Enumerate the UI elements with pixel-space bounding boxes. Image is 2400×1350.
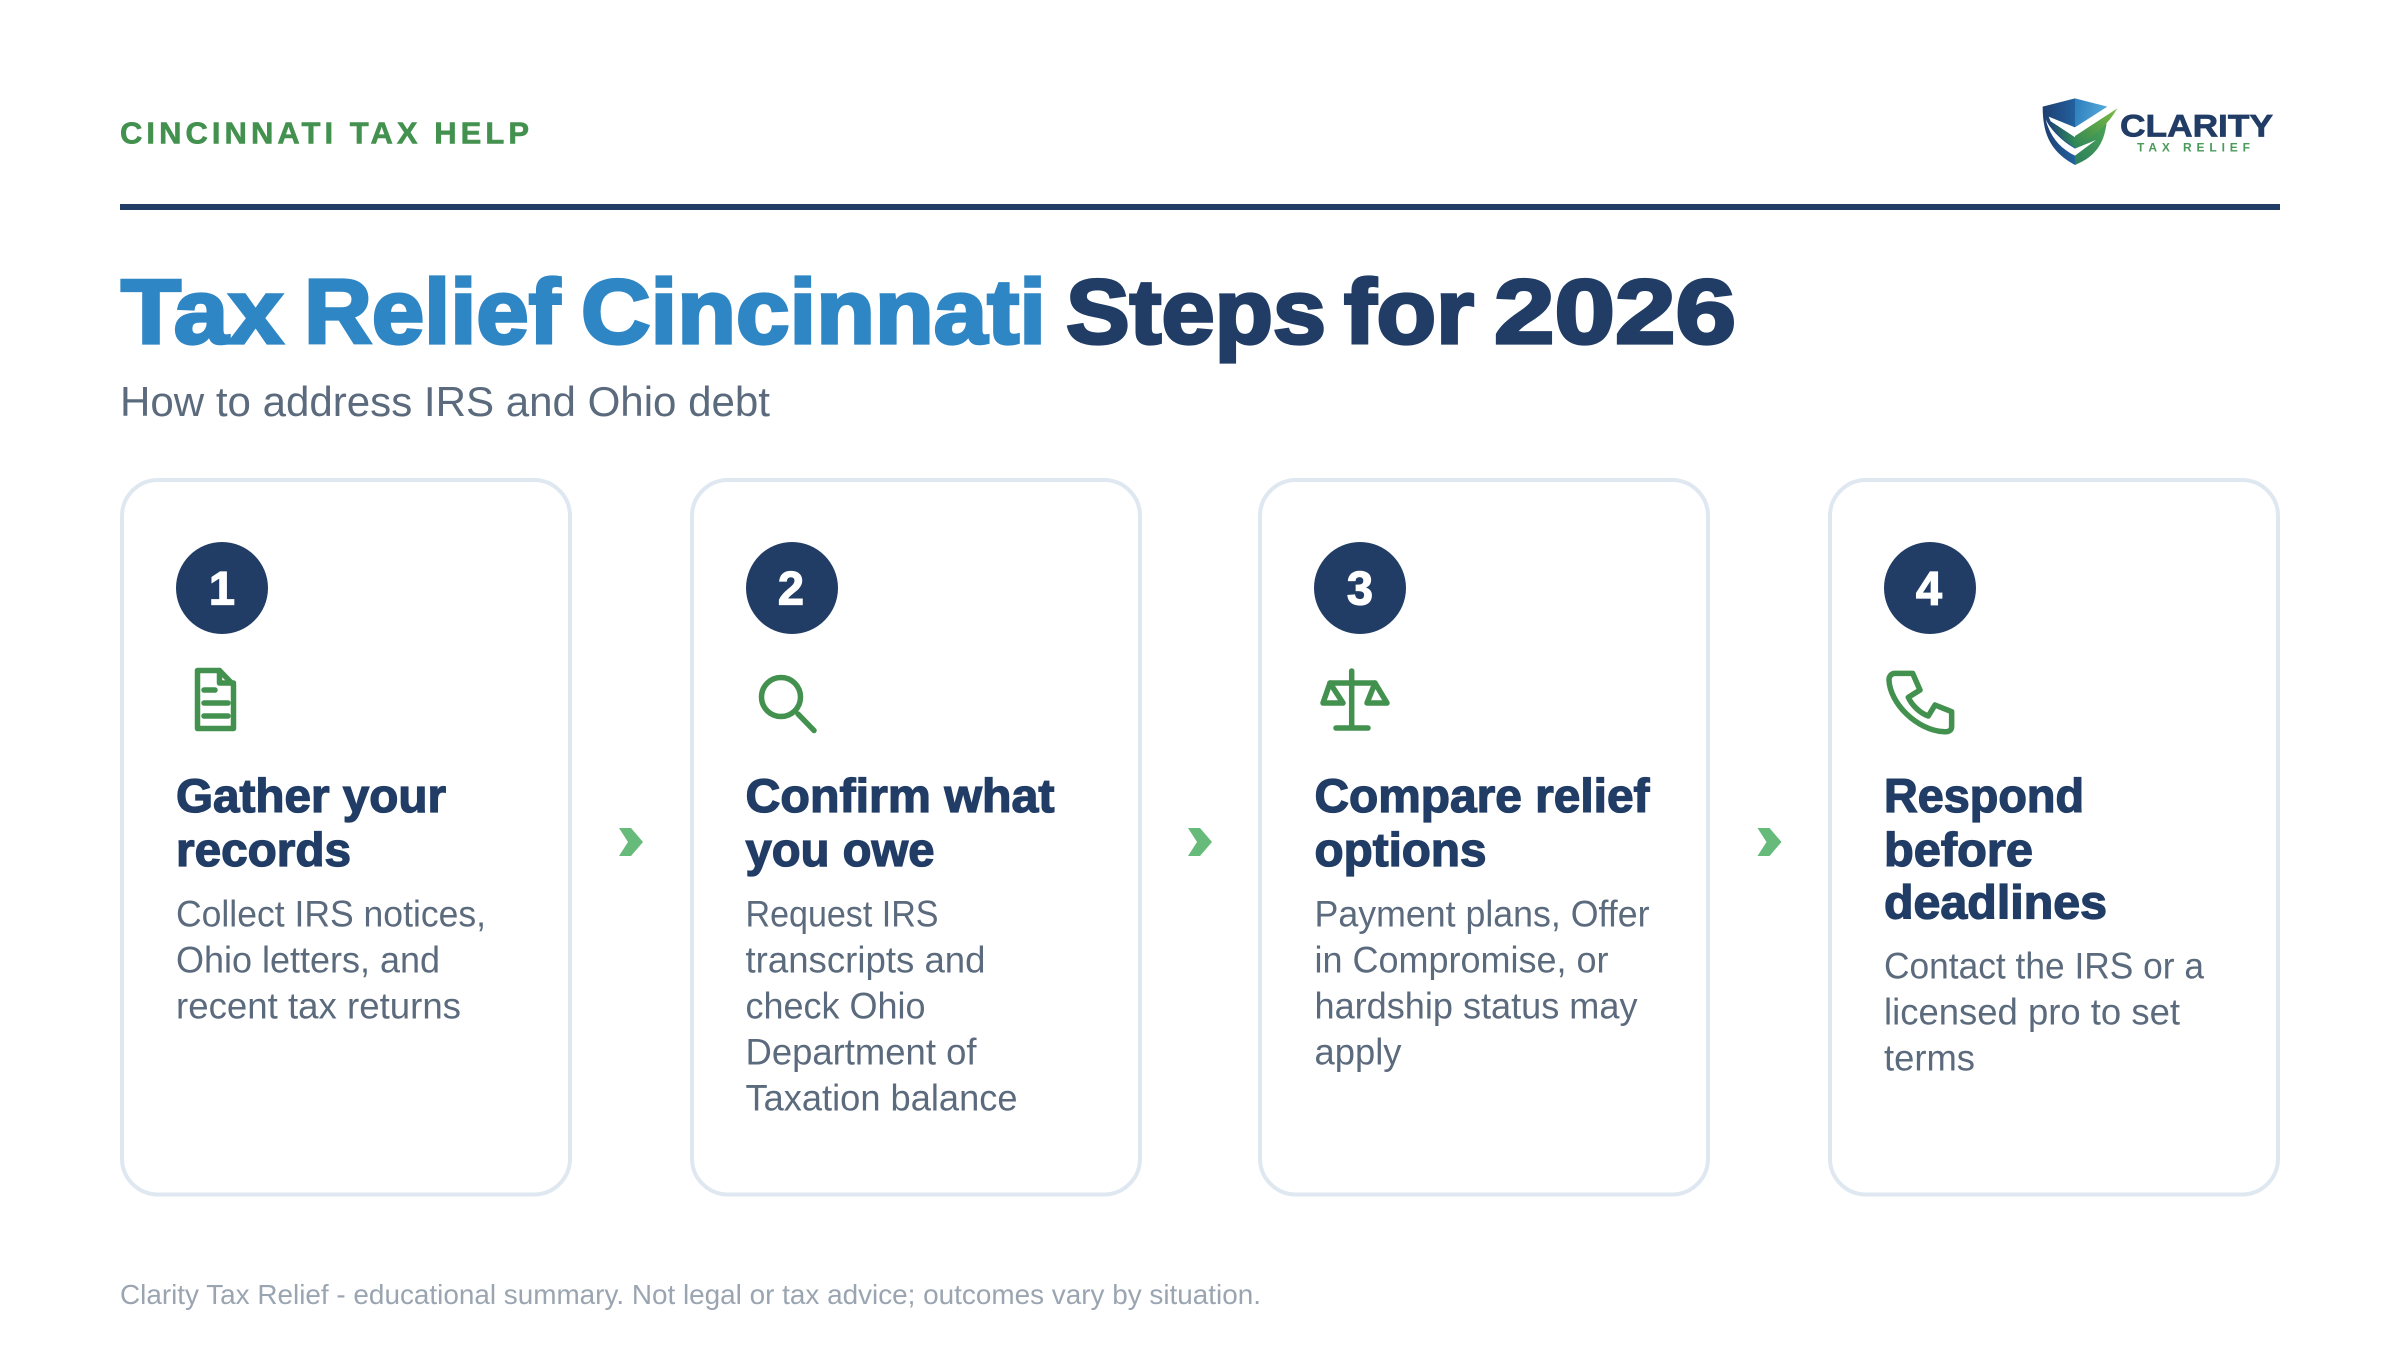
heading: Confirm what	[746, 769, 1055, 822]
header rule	[120, 204, 2280, 210]
heading: before	[1884, 823, 2033, 876]
arrow 3	[1758, 828, 1782, 856]
icon: shield with check	[2043, 98, 2117, 165]
heading: you owe	[746, 823, 934, 876]
description: Ohio letters, and	[176, 940, 440, 980]
description: transcripts and	[746, 940, 986, 980]
heading	[746, 769, 1055, 876]
step number 2	[746, 542, 838, 634]
title: Tax	[121, 262, 283, 363]
description	[1314, 894, 1650, 1072]
description: Department of	[746, 1032, 977, 1072]
description: apply	[1314, 1032, 1402, 1072]
logo tagline: TAX RELIEF	[2137, 141, 2250, 155]
heading	[176, 769, 446, 876]
title: for	[1344, 262, 1474, 363]
step number 4	[1884, 542, 1976, 634]
icon: balance scale	[1323, 671, 1387, 728]
heading: options	[1314, 823, 1486, 876]
icon: document	[198, 670, 234, 728]
title: 2026	[1494, 262, 1736, 363]
panel: step 4	[1830, 480, 2278, 1194]
description	[176, 894, 486, 1026]
heading: Compare relief	[1314, 769, 1650, 822]
panel: step 3	[1260, 480, 1708, 1194]
arrow 1	[619, 828, 643, 856]
icon: magnifying glass	[762, 678, 814, 730]
heading: Respond	[1884, 769, 2084, 822]
step number 4: 4	[1916, 562, 1942, 614]
heading: deadlines	[1884, 876, 2107, 928]
description: terms	[1884, 1038, 1975, 1078]
logo: Clarity Tax Relief	[2043, 98, 2273, 165]
step number 2: 2	[778, 562, 804, 614]
description: licensed pro to set	[1884, 992, 2181, 1032]
step number 3	[1314, 542, 1406, 634]
description: recent tax returns	[176, 986, 461, 1026]
subtitle: How to address IRS and Ohio debt	[120, 378, 770, 425]
description: Collect IRS notices,	[176, 894, 486, 934]
logo wordmark: CLARITY	[2120, 108, 2273, 144]
title	[121, 262, 1736, 363]
description: in Compromise, or	[1314, 940, 1608, 980]
panel: step 1	[122, 480, 570, 1194]
arrow 2	[1188, 828, 1212, 856]
title: Steps	[1066, 262, 1326, 363]
title: Cincinnati	[581, 262, 1046, 363]
description	[1884, 946, 2204, 1078]
heading	[1314, 769, 1650, 876]
step number 1	[176, 542, 268, 634]
title: Relief	[304, 262, 561, 363]
description: hardship status may	[1314, 986, 1638, 1026]
eyebrow label: CINCINNATI TAX HELP	[120, 116, 529, 150]
heading: records	[176, 823, 351, 876]
description: Taxation balance	[746, 1078, 1018, 1118]
heading: Gather your	[176, 769, 446, 822]
panel: step 2	[692, 480, 1140, 1194]
step number 3: 3	[1347, 562, 1373, 614]
step number 1: 1	[209, 562, 235, 614]
description: Request IRS	[746, 894, 938, 934]
description: Payment plans, Offer	[1314, 894, 1650, 934]
icon: phone	[1889, 673, 1952, 732]
heading	[1884, 769, 2107, 928]
description: check Ohio	[746, 986, 926, 1026]
description: Contact the IRS or a	[1884, 946, 2204, 986]
description	[746, 894, 1018, 1118]
footer disclaimer: Clarity Tax Relief - educational summary. Not legal or tax advice; outcomes vary by situation.	[120, 1279, 1261, 1310]
